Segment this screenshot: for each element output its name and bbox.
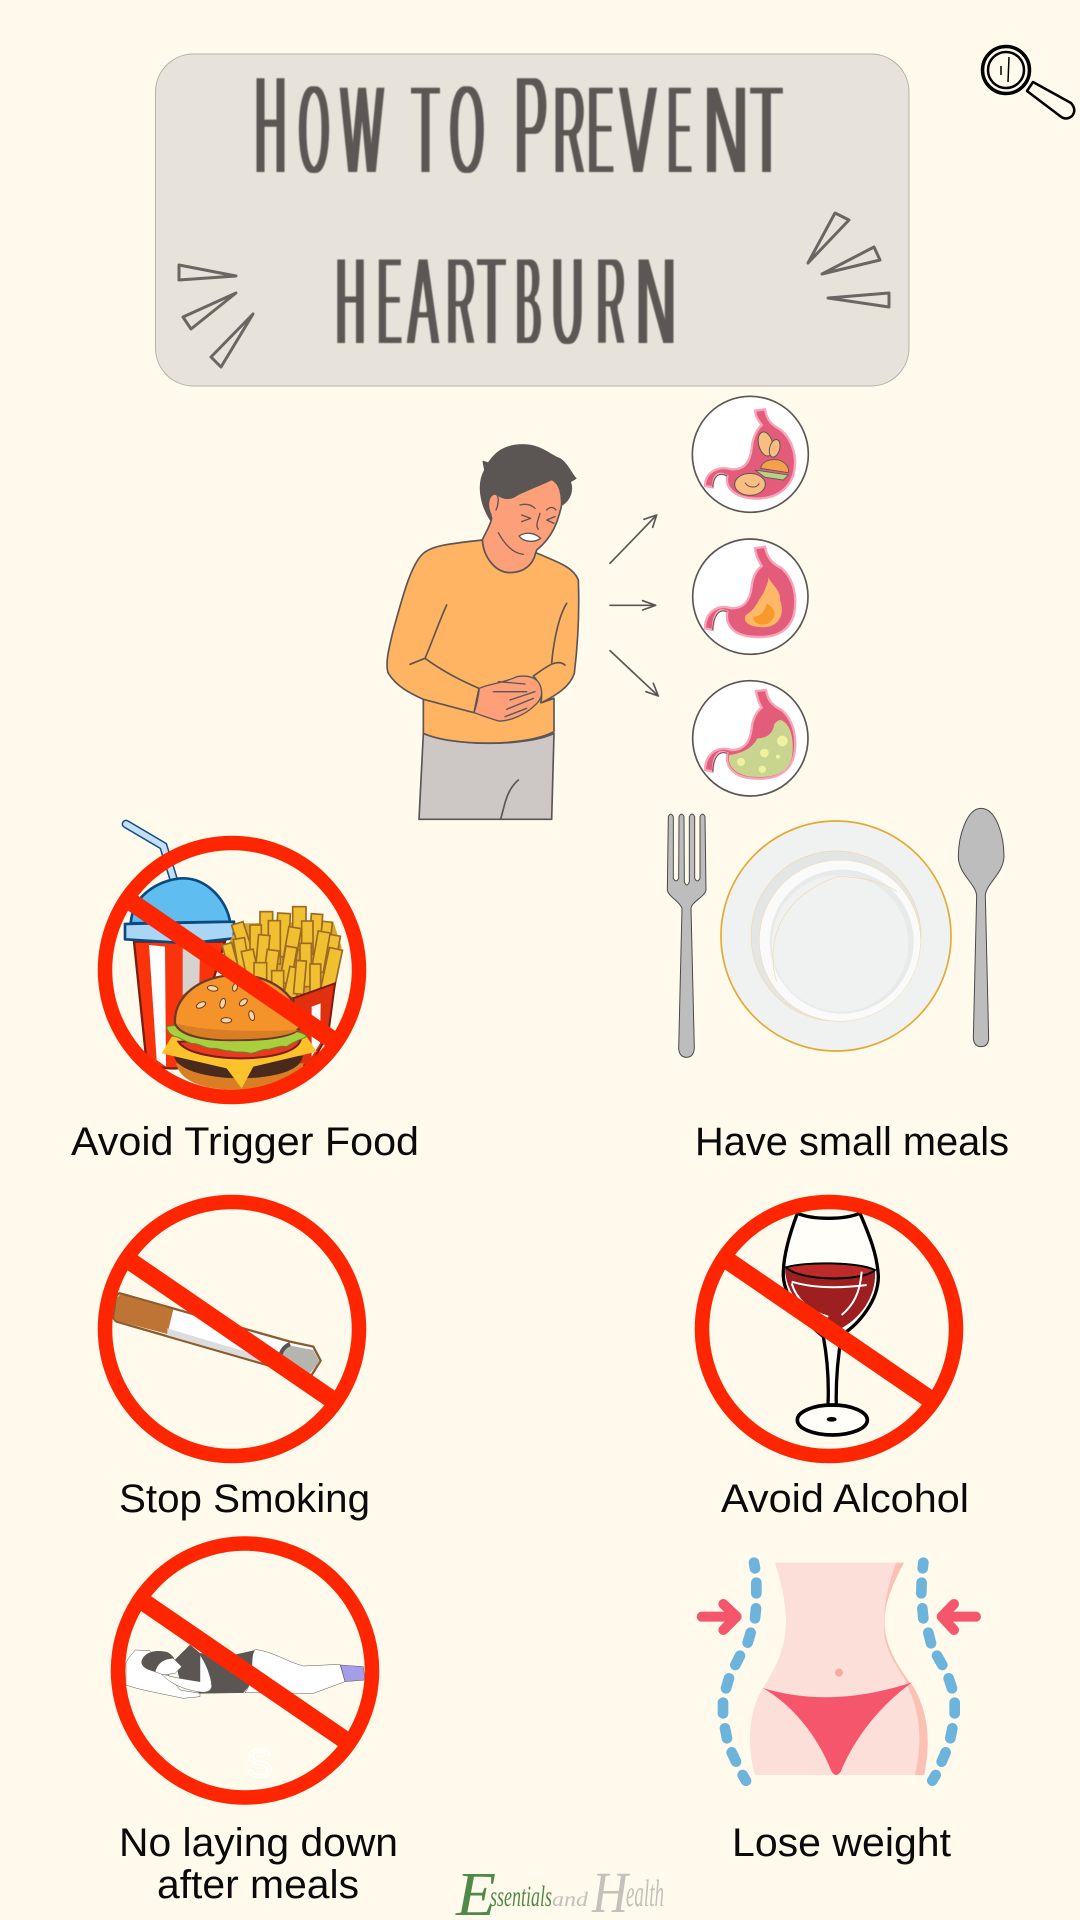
label: Avoid Alcohol: [721, 1477, 969, 1521]
icon: wine glass: [783, 1213, 878, 1435]
title: How to Prevent Heartburn: [255, 46, 782, 372]
panel: avoid trigger food: [71, 824, 419, 1164]
label: No laying down: [119, 1821, 398, 1865]
hair: [481, 445, 576, 520]
trousers: [419, 733, 554, 819]
drinking straw: [126, 824, 173, 878]
tomato: [178, 1040, 301, 1058]
bikini: [763, 1682, 912, 1775]
title: How to Prevent Heartburn: E: [668, 59, 691, 202]
icon: person lying down: [126, 1645, 365, 1698]
title: How to Prevent Heartburn: T: [478, 230, 505, 372]
icon: magnifying glass: [982, 46, 1074, 118]
icon: stomach with acid: [693, 681, 808, 796]
title: How to Prevent Heartburn: P: [515, 46, 547, 205]
patty: [174, 1056, 303, 1078]
title: How to Prevent Heartburn: B: [516, 230, 541, 372]
prohibition sign: [702, 1202, 956, 1456]
navel: [835, 1669, 843, 1677]
panel: lose weight: [702, 1563, 976, 1865]
sweater: [387, 540, 579, 743]
title: How to Prevent Heartburn: U: [552, 230, 583, 372]
icon: cigarette: [113, 1293, 321, 1375]
prohibition sign: [105, 1202, 359, 1456]
cup: [134, 942, 225, 1068]
prohibition sign: [118, 1544, 372, 1798]
title panel: T: [751, 59, 782, 202]
fries: [222, 907, 342, 1000]
squeeze arrows: [702, 1604, 976, 1630]
title: How to Prevent Heartburn: H: [336, 230, 365, 372]
label line two: after meals: [157, 1863, 359, 1907]
title: How to Prevent Heartburn: T: [412, 59, 439, 202]
label: Stop Smoking: [119, 1477, 370, 1521]
mouth: [519, 533, 541, 541]
title: How to Prevent Heartburn: R: [447, 230, 475, 372]
icon: stomach with food: [692, 396, 808, 512]
title: How to Prevent Heartburn: N: [704, 59, 748, 202]
panel: no laying down after meals: [118, 1544, 398, 1907]
label: Avoid Trigger Food: [71, 1120, 419, 1164]
neck and face: [482, 478, 562, 573]
top bun: [175, 975, 300, 1040]
ear: [489, 494, 498, 514]
title: How to Prevent Heartburn: O: [299, 59, 329, 202]
arrows to stomach icons: [610, 515, 658, 696]
face features: [498, 504, 556, 554]
illustration: man holding stomach: [387, 445, 579, 819]
fork: [667, 814, 706, 1057]
label: Have small meals: [695, 1120, 1009, 1164]
cheese: [162, 1037, 317, 1088]
sweater arm folds: [410, 603, 567, 713]
title panel: [156, 46, 909, 386]
lettuce: [167, 1025, 307, 1053]
title: How to Prevent Heartburn: N: [636, 230, 676, 372]
panel: have small meals: [667, 808, 1009, 1164]
hands: [474, 676, 542, 721]
cup lid: [131, 878, 230, 923]
icon: plate and cutlery: [667, 808, 1004, 1057]
icon: waist: [702, 1563, 976, 1781]
brand signature: ealth: [626, 1873, 664, 1915]
prohibition sign: [105, 843, 359, 1097]
icon: right burst marks: [808, 213, 889, 307]
burger bottom bun: [176, 1063, 304, 1090]
body: [750, 1563, 927, 1775]
icon: left burst marks: [179, 265, 253, 367]
title: How to Prevent Heartburn: E: [588, 59, 613, 202]
title: How to Prevent Heartburn: R: [597, 230, 625, 372]
brand signature: ssentials: [490, 1880, 552, 1913]
plate: [721, 821, 951, 1051]
label: Lose weight: [732, 1821, 951, 1865]
icon: stomach with fire: [693, 539, 808, 654]
panel: stop smoking: [105, 1202, 370, 1521]
title: How to Prevent Heartburn: A: [408, 230, 438, 372]
title: How to Prevent Heartburn: V: [620, 59, 656, 202]
faint watermark letter: S: [246, 1742, 273, 1786]
title: How to Prevent Heartburn: R: [554, 59, 585, 202]
title: How to Prevent Heartburn: O: [450, 59, 484, 202]
brand signature: and: [552, 1889, 589, 1911]
fries box: [293, 983, 335, 1067]
sesame seeds: [195, 983, 256, 1023]
title: How to Prevent Heartburn: H: [255, 46, 286, 205]
panel: avoid alcohol: [702, 1202, 969, 1521]
dashed outline: [723, 1563, 955, 1781]
icon: fast food: [125, 824, 342, 1090]
title: How to Prevent Heartburn: E: [378, 230, 401, 372]
spoon: [958, 808, 1004, 1047]
title: How to Prevent Heartburn: W: [341, 59, 383, 202]
